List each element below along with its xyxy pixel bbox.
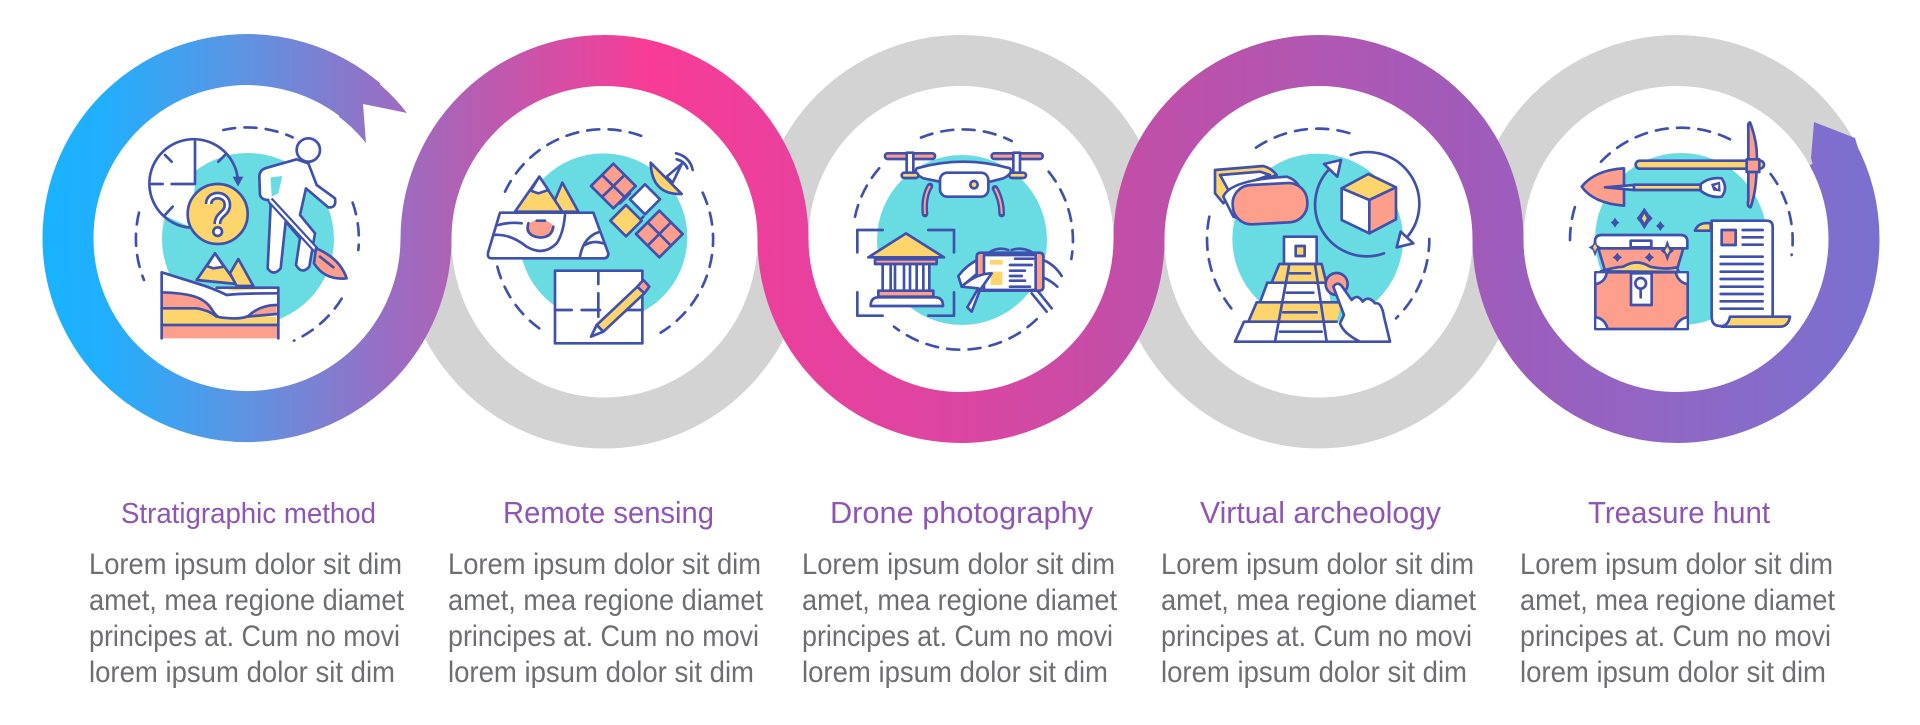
text block: virtual archeology: Lorem ipsum dolor sit dim [1161, 548, 1474, 581]
strata with mountains [162, 253, 278, 338]
grid paper with pencil [555, 271, 649, 343]
text block: treasure hunt: amet, mea regione diamet [1520, 584, 1836, 617]
text block: virtual archeology: lorem ipsum dolor sit dim [1161, 656, 1467, 689]
text block: remote sensing: Lorem ipsum dolor sit dim [448, 548, 761, 581]
document scroll [1695, 221, 1790, 327]
satellite [591, 153, 693, 257]
icon: stratigraphic method [136, 127, 359, 341]
hands holding phone [958, 249, 1062, 312]
text block: virtual archeology: principes at. Cum no movi [1161, 620, 1472, 653]
text block: virtual archeology: amet, mea regione diamet [1161, 584, 1477, 617]
drone [885, 153, 1043, 214]
clock [149, 139, 243, 228]
question mark badge [188, 184, 248, 244]
VR headset [1215, 166, 1308, 225]
heading: stratigraphic method: Stratigraphic method [121, 498, 376, 530]
icon: virtual archeology [1207, 129, 1429, 342]
text block: treasure hunt [1520, 548, 1836, 689]
text block: stratigraphic method: Lorem ipsum dolor sit dim [89, 548, 402, 581]
heading: drone photography: Drone photography [830, 495, 1093, 530]
gray ribbon behind the circles [426, 60, 1832, 423]
icon: remote sensing [488, 129, 713, 343]
text block: drone photography: amet, mea regione diamet [802, 584, 1118, 617]
treasure chest [1589, 235, 1688, 329]
rotating cube [1315, 152, 1419, 256]
text block: stratigraphic method: lorem ipsum dolor sit dim [89, 656, 395, 689]
text block: treasure hunt: principes at. Cum no movi [1520, 620, 1831, 653]
heading: treasure hunt: Treasure hunt [1588, 495, 1770, 530]
map with mountains [488, 177, 608, 258]
text block: remote sensing: principes at. Cum no movi [448, 620, 759, 653]
text block: drone photography: lorem ipsum dolor sit dim [802, 656, 1108, 689]
icon: treasure hunt [1570, 122, 1793, 329]
text block: stratigraphic method: amet, mea regione diamet [89, 584, 405, 617]
shovel [1582, 168, 1725, 206]
pyramid with pointing hand [1235, 237, 1390, 342]
text block: remote sensing: lorem ipsum dolor sit dim [448, 656, 754, 689]
heading: remote sensing: Remote sensing [503, 495, 714, 530]
museum in frame [857, 230, 954, 316]
text block: stratigraphic method: principes at. Cum no movi [89, 620, 400, 653]
text block: remote sensing [448, 548, 764, 689]
text block: remote sensing: amet, mea regione diamet [448, 584, 764, 617]
text block: treasure hunt: lorem ipsum dolor sit dim [1520, 656, 1826, 689]
text block: drone photography [802, 548, 1118, 689]
digging person [259, 138, 347, 279]
text block: treasure hunt: Lorem ipsum dolor sit dim [1520, 548, 1833, 581]
icon: drone photography [855, 129, 1073, 350]
text block: stratigraphic method [89, 548, 405, 689]
text block: drone photography: principes at. Cum no movi [802, 620, 1113, 653]
text block: virtual archeology [1161, 548, 1477, 689]
pickaxe [1636, 122, 1764, 207]
heading: virtual archeology: Virtual archeology [1200, 495, 1441, 530]
text block: drone photography: Lorem ipsum dolor sit dim [802, 548, 1115, 581]
gradient ribbon with arrow ends [68, 60, 1859, 418]
sparkles [1611, 208, 1665, 231]
